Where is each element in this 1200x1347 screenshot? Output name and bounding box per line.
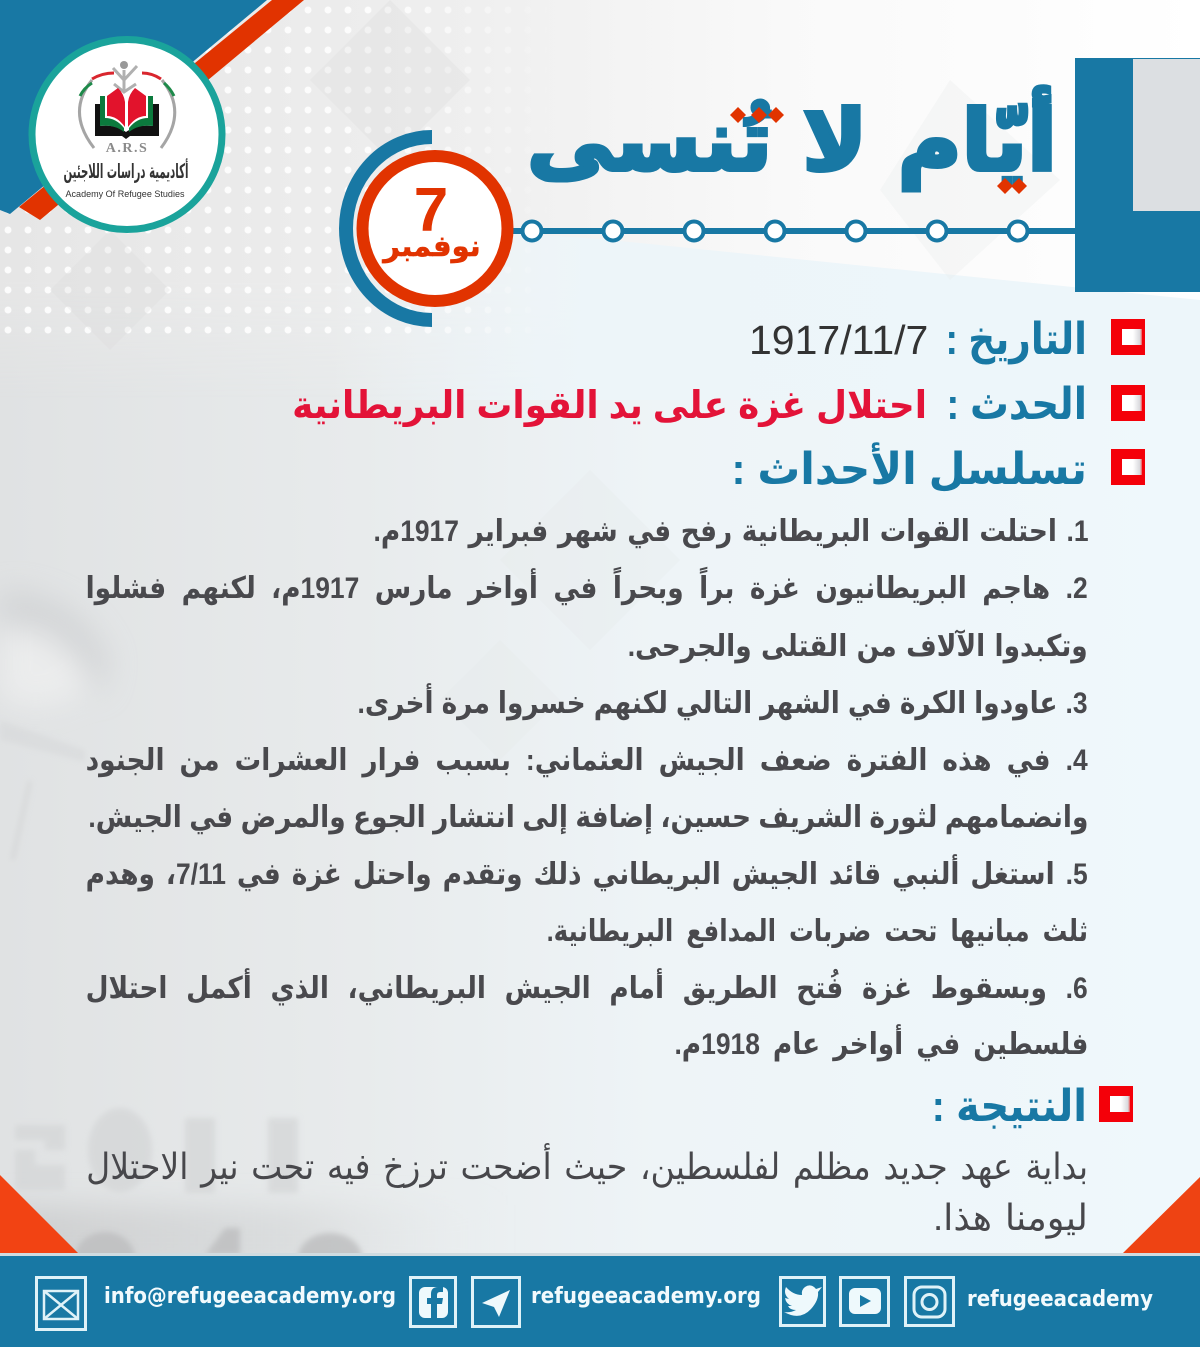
- item 2 line 2: وتكبدوا الآلاف من القتلى والجرحى.: [628, 630, 1088, 663]
- item 4 line 2: وانضمامهم لثورة الشريف حسين، إضافة إلى انتشار الجوع والمرض في الجيش.: [88, 801, 1088, 834]
- icon: instagram: [906, 1278, 954, 1326]
- icon: youtube: [840, 1278, 888, 1326]
- title: أيّام لا تُنسى: [527, 86, 1057, 191]
- icon: telegram: [472, 1278, 520, 1326]
- sequence heading: تسلسل الأحداث :: [731, 445, 1087, 494]
- item 2 line 1: 2. هاجم البريطانيون غزة براً وبحراً في أواخر مارس 1917م، لكنهم فشلوا: [86, 572, 1088, 605]
- logo initials: A.R.S: [106, 141, 148, 156]
- icon: twitter: [780, 1278, 824, 1326]
- social handle: refugeeacademy: [967, 1287, 1153, 1312]
- event value: احتلال غزة على يد القوات البريطانية: [292, 385, 927, 427]
- icon: mail: [36, 1278, 86, 1330]
- logo arabic name: أكاديمية دراسات اللاجئين: [64, 157, 188, 183]
- item 3: 3. عاودوا الكرة في الشهر التالي لكنهم خسروا مرة أخرى.: [358, 687, 1088, 720]
- logo english name: Academy Of Refugee Studies: [66, 189, 185, 199]
- date label: التاريخ :: [945, 315, 1087, 364]
- logo emblem: [79, 61, 175, 148]
- item 6 line 1: 6. وبسقوط غزة فُتح الطريق أمام الجيش البريطاني، الذي أكمل احتلال: [86, 972, 1088, 1005]
- email address: info@refugeeacademy.org: [104, 1284, 396, 1309]
- item 4 line 1: 4. في هذه الفترة ضعف الجيش العثماني: بسبب فرار العشرات من الجنود: [86, 744, 1088, 777]
- result text line 2: ليومنا هذا.: [933, 1197, 1088, 1238]
- date value: 1917/11/7: [749, 317, 928, 363]
- bullet: date: [1111, 319, 1145, 355]
- website: refugeeacademy.org: [531, 1284, 761, 1309]
- item 5 line 1: 5. استغل ألنبي قائد الجيش البريطاني ذلك وتقدم واحتل غزة في 7/11، وهدم: [86, 858, 1088, 891]
- date month: نوفمبر: [381, 229, 481, 263]
- event label: الحدث :: [946, 380, 1087, 429]
- bullet: result: [1099, 1086, 1133, 1122]
- list of events: [86, 515, 1088, 1062]
- bullet: sequence: [1111, 449, 1145, 485]
- item 1: 1. احتلت القوات البريطانية رفح في شهر فبراير 1917م.: [373, 515, 1088, 548]
- date number: 7: [414, 176, 448, 245]
- bullet: event: [1111, 385, 1145, 421]
- icon: facebook: [410, 1278, 456, 1326]
- item 5 line 2: ثلث مبانيها تحت ضربات المدافع البريطانية.: [547, 915, 1088, 948]
- item 6 line 2: فلسطين في أواخر عام 1918م.: [674, 1028, 1088, 1061]
- result text line 1: بداية عهد جديد مظلم لفلسطين، حيث أضحت ترزخ فيه تحت نير الاحتلال: [86, 1146, 1088, 1187]
- result heading: النتيجة :: [932, 1082, 1087, 1131]
